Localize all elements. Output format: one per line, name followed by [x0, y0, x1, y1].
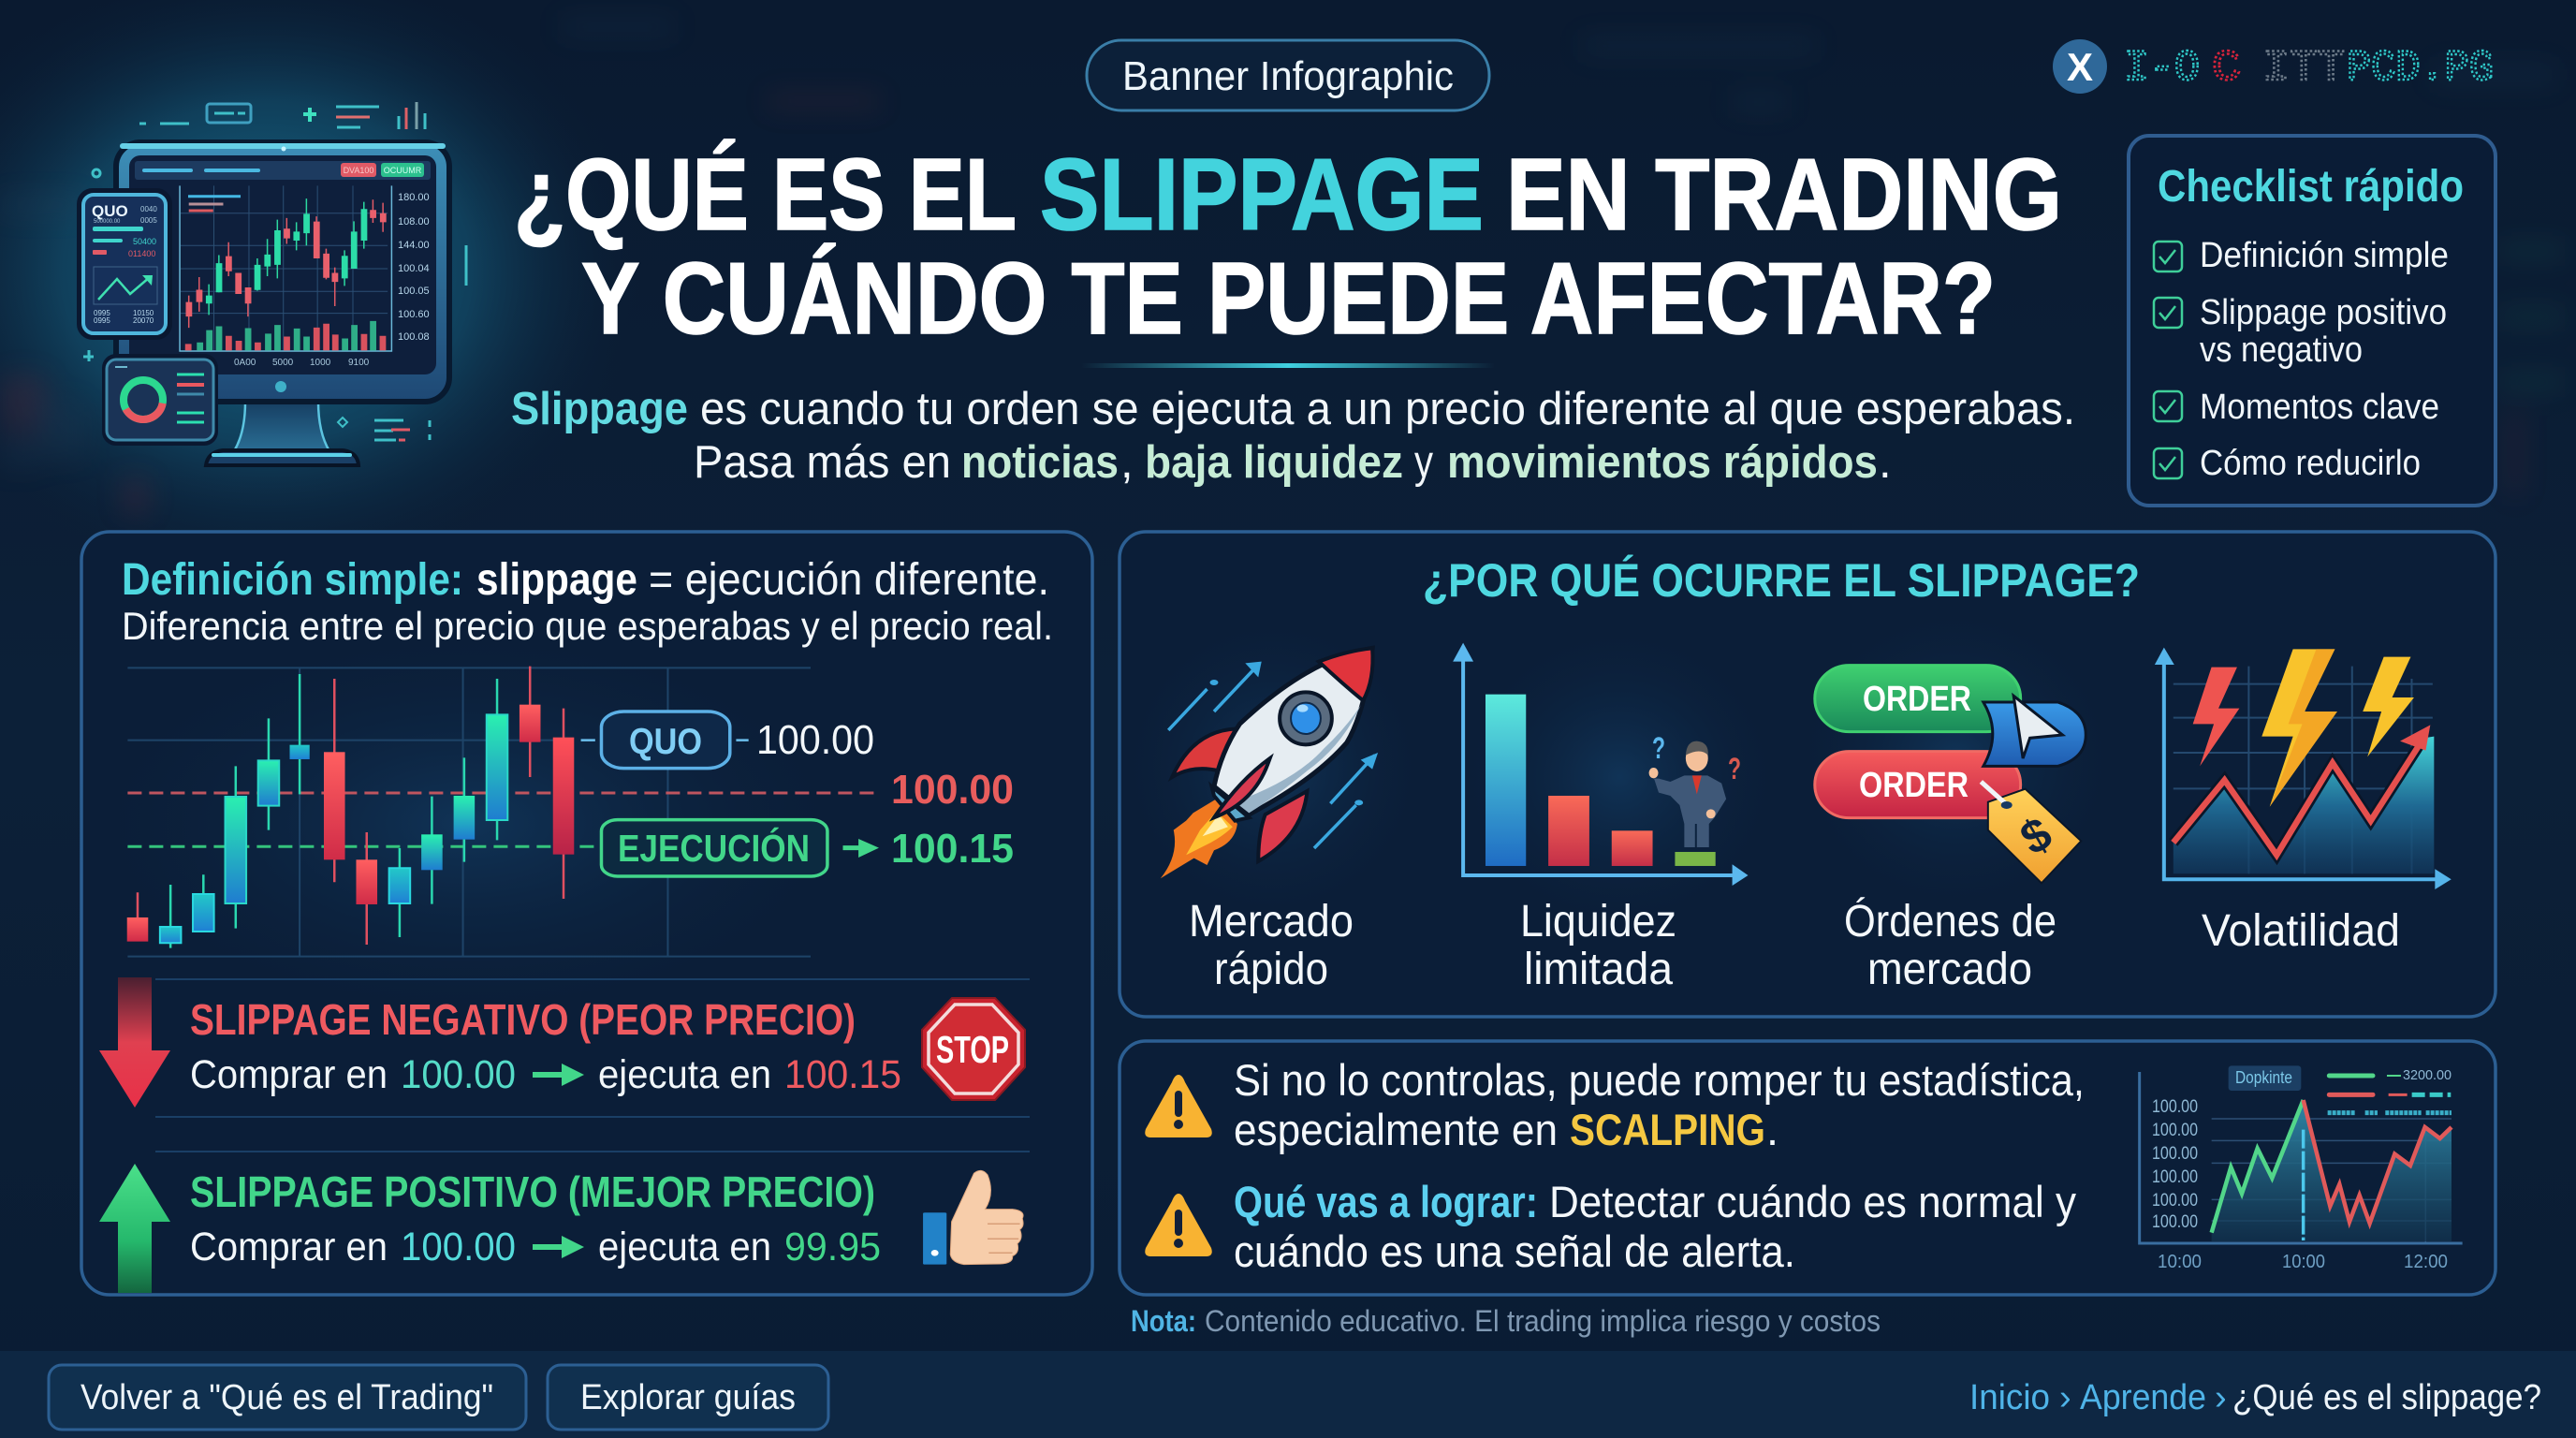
button: guides [548, 1365, 828, 1430]
cause labels: Volatilidad [2202, 906, 2400, 956]
monitor illustration: 0A00 [234, 358, 256, 368]
mini chart: 3200.00 [2403, 1067, 2452, 1083]
icon: stop sign [922, 998, 1025, 1100]
mini chart: Dopkinte [2235, 1068, 2292, 1087]
mini chart: 12:00 [2404, 1252, 2448, 1272]
subtitle: baja liquidez [1145, 437, 1403, 488]
subtitle: . [1879, 437, 1892, 488]
button: back: Volver a "Qué es el Trading" [80, 1378, 493, 1417]
monitor illustration [80, 102, 466, 465]
subtitle: es cuando tu orden se ejecuta a un precio diferente al que esperabas. [700, 384, 2075, 434]
monitor illustration: 0040 [140, 205, 157, 213]
badge: Banner Infographic [1087, 40, 1489, 110]
icon: low liquidity chart [1453, 643, 1749, 886]
icon: market orders: ORDER [1859, 766, 1969, 805]
panel: definition [66, 532, 1092, 1295]
floating interface accents [83, 102, 466, 440]
title: SLIPPAGE [1040, 138, 1484, 252]
question marks: ? [1728, 752, 1741, 785]
monitor stand [234, 402, 329, 451]
monitor illustration: 9100 [348, 358, 370, 368]
mini chart: 100.00 [2152, 1191, 2198, 1211]
title: Y CUÁNDO TE PUEDE AFECTAR? [581, 242, 1996, 356]
monitor frame [116, 142, 449, 402]
positive slippage text: 100.00 [401, 1225, 516, 1269]
subtitle: movimientos rápidos [1447, 437, 1878, 488]
monitor illustration: 5000 [272, 358, 294, 368]
monitor price labels [398, 192, 430, 343]
icon: warning [1145, 1075, 1212, 1137]
arrow: negative [99, 977, 170, 1108]
logo: C [2212, 44, 2241, 93]
warning text: especialmente en [1234, 1105, 1558, 1154]
mini chart: 100.00 [2152, 1121, 2198, 1140]
mini chart: 10:00 [2282, 1252, 2325, 1272]
definition text: Definición simple: [122, 555, 463, 605]
note: Contenido educativo. El trading implica riesgo y costos [1205, 1304, 1881, 1338]
mini chart: 100.00 [2152, 1097, 2198, 1117]
chart labels: 100.15 [891, 826, 1014, 872]
subtitle: Pasa más en [694, 437, 951, 488]
icon: thumbs up [923, 1170, 1023, 1265]
button: guides: Explorar guías [580, 1378, 796, 1417]
checklist heading: Checklist rápido [2158, 162, 2464, 212]
breadcrumb: › [2215, 1378, 2227, 1417]
positive slippage text: Comprar en [190, 1225, 388, 1269]
mini chart: 10:00 [2158, 1252, 2202, 1272]
monitor illustration: 0995 [94, 316, 110, 325]
goal text: cuándo es una señal de alerta. [1234, 1226, 1795, 1276]
warning text: . [1766, 1105, 1778, 1154]
cause labels: limitada [1524, 945, 1673, 994]
negative slippage text: ejecuta en [598, 1052, 771, 1097]
note: Nota: [1131, 1304, 1196, 1338]
monitor base [206, 450, 359, 465]
panel: why slippage happens [1114, 532, 2496, 1017]
checklist checkboxes [2154, 242, 2182, 478]
cause labels: Liquidez [1520, 897, 1676, 946]
negative slippage text: SLIPPAGE NEGATIVO (PEOR PRECIO) [190, 995, 856, 1044]
breadcrumb: Aprende [2080, 1378, 2206, 1417]
chart labels: QUO [629, 722, 702, 762]
cause labels: Mercado [1189, 897, 1354, 946]
goal text [1234, 1177, 2076, 1276]
monitor price labels: 100.60 [398, 309, 430, 320]
monitor illustration: 50400 [133, 237, 156, 246]
checklist items: Momentos clave [2200, 388, 2439, 427]
title: EN TRADING [1506, 138, 2062, 252]
logo: PCD.PG [2347, 44, 2494, 93]
icon: rocket [1161, 648, 1378, 878]
monitor illustration: 20070 [133, 316, 154, 325]
breadcrumb: Inicio [1969, 1378, 2050, 1417]
monitor illustration: 0995 [94, 309, 110, 317]
definition text: slippage [476, 555, 637, 605]
cause labels: Órdenes de [1844, 896, 2056, 946]
footer bar [0, 1351, 2576, 1438]
chart labels [618, 717, 1014, 872]
monitor illustration: DVA100 [344, 166, 373, 175]
warning text: Si no lo controlas, puede romper tu estadística, [1234, 1055, 2085, 1105]
monitor price labels: 144.00 [398, 240, 430, 251]
logo [2053, 39, 2494, 94]
icon: warning [1145, 1194, 1212, 1256]
icon: market orders: $ [2012, 807, 2060, 865]
checklist items: Slippage positivo [2200, 293, 2447, 332]
definition text [122, 555, 1053, 648]
monitor price labels: 100.05 [398, 286, 430, 297]
breadcrumb [1969, 1378, 2541, 1417]
arrow: positive [99, 1164, 170, 1293]
icon: market orders: ORDER [1863, 680, 1971, 719]
checklist items [2200, 236, 2449, 483]
monitor illustration: 1000 [310, 358, 331, 368]
checklist items: Definición simple [2200, 236, 2449, 275]
positive slippage text: 99.95 [784, 1225, 881, 1269]
mini chart [2140, 1065, 2463, 1272]
warning text [1234, 1055, 2085, 1154]
chart labels: 100.00 [756, 717, 874, 763]
monitor price labels: 108.00 [398, 216, 430, 227]
button: back [49, 1365, 526, 1430]
positive slippage text: ejecuta en [598, 1225, 771, 1269]
monitor illustration: 0005 [140, 216, 157, 225]
breadcrumb: ¿Qué es el slippage? [2232, 1378, 2541, 1417]
definition text: Diferencia entre el precio que esperabas y el precio real. [122, 604, 1053, 648]
mini chart: 100.00 [2152, 1144, 2198, 1164]
mini chart: 100.00 [2152, 1167, 2198, 1187]
title [514, 138, 2062, 356]
monitor illustration: OCUUMR [384, 166, 422, 175]
monitor price labels: 100.08 [398, 331, 430, 343]
monitor screen [129, 155, 436, 374]
question marks [1652, 731, 1741, 785]
checklist items: vs negativo [2200, 330, 2363, 370]
logo: X [2067, 45, 2093, 89]
monitor illustration: 10150 [133, 309, 154, 317]
logo: I-O [2124, 44, 2200, 93]
chart labels: 100.00 [891, 767, 1014, 813]
negative slippage text [190, 995, 901, 1097]
checklist items: Cómo reducirlo [2200, 444, 2421, 483]
negative slippage text: 100.15 [784, 1052, 901, 1097]
badge: Banner Infographic: Banner Infographic [1122, 53, 1454, 99]
tablet [80, 191, 169, 337]
monitor price labels: 100.04 [398, 263, 430, 274]
mini chart: 100.00 [2152, 1212, 2198, 1232]
positive slippage text [190, 1167, 881, 1269]
logo: ITT [2262, 44, 2345, 93]
breadcrumb: › [2059, 1378, 2071, 1417]
monitor illustration: 500000.00 [94, 219, 121, 225]
monitor price labels: 180.00 [398, 192, 430, 203]
negative slippage text: 100.00 [401, 1052, 516, 1097]
panel: warnings [1120, 1041, 2496, 1295]
donut card [105, 357, 215, 443]
candlestick chart [127, 667, 879, 957]
positive slippage text: SLIPPAGE POSITIVO (MEJOR PRECIO) [190, 1167, 875, 1216]
question marks: ? [1652, 731, 1665, 765]
definition text: = ejecución diferente. [649, 555, 1049, 605]
monitor illustration: QUO [92, 202, 128, 220]
icon: stop sign: STOP [936, 1028, 1009, 1071]
warning text: SCALPING [1570, 1105, 1765, 1154]
title: ¿QUÉ ES EL [514, 138, 1017, 252]
goal text: Detectar cuándo es normal y [1549, 1177, 2076, 1226]
chart labels: EJECUCIÓN [618, 827, 810, 870]
monitor illustration: 011400 [128, 249, 155, 258]
subtitle: noticias [961, 437, 1119, 488]
panel: checklist [2129, 136, 2496, 506]
cause labels [1189, 896, 2400, 994]
cause labels: mercado [1867, 945, 2032, 994]
subtitle: , [1120, 437, 1134, 488]
icon: market orders [1815, 666, 2086, 883]
cause labels: rápido [1214, 945, 1328, 994]
panel heading: ¿POR QUÉ OCURRE EL SLIPPAGE? [1423, 554, 2140, 607]
subtitle [511, 384, 2075, 488]
negative slippage text: Comprar en [190, 1052, 388, 1097]
subtitle: y [1414, 437, 1433, 488]
subtitle: Slippage [511, 384, 688, 434]
icon: volatility chart [2155, 648, 2452, 889]
goal text: Qué vas a lograr: [1234, 1177, 1538, 1226]
